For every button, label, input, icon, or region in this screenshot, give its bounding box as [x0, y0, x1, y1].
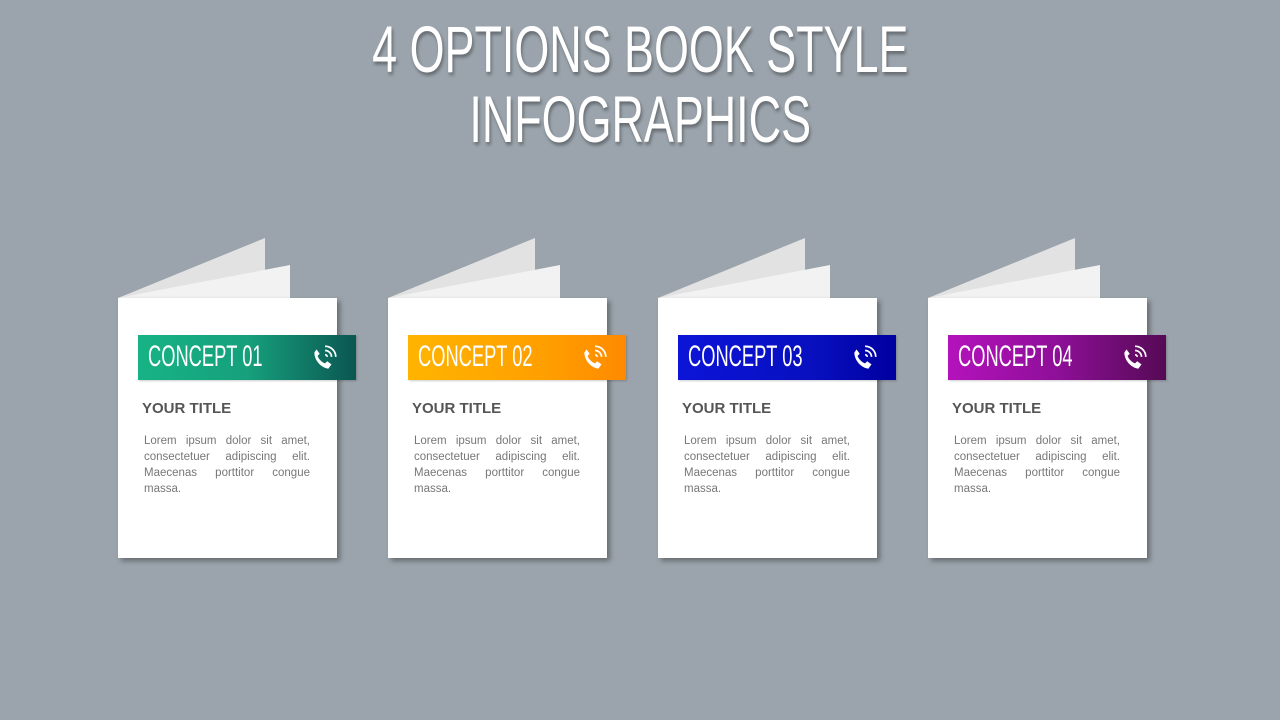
heading: YOUR TITLE [682, 400, 771, 417]
banner: concept 02 [408, 335, 626, 380]
icon: phone [854, 345, 877, 369]
banner: concept 03 [678, 335, 896, 380]
text block: Lorem ipsum dolor sit amet, consectetuer adipiscing elit. Maecenas porttitor congue massa. [414, 435, 580, 495]
heading: YOUR TITLE [142, 400, 231, 417]
banner: concept 02: CONCEPT 02 [418, 340, 533, 373]
book: concept 01 [118, 238, 358, 564]
front page [658, 298, 877, 558]
back pages [928, 238, 1100, 298]
banner: concept 01: CONCEPT 01 [148, 340, 263, 373]
back pages [658, 238, 830, 298]
text block: Lorem ipsum dolor sit amet, consectetuer adipiscing elit. Maecenas porttitor congue massa. [954, 435, 1120, 495]
banner: concept 01 [138, 335, 356, 380]
banner: concept 04 [948, 335, 1166, 380]
title: INFOGRAPHICS [469, 82, 811, 156]
front page [118, 298, 337, 558]
icon: phone [584, 345, 607, 369]
title [372, 12, 910, 156]
banner: concept 04: CONCEPT 04 [958, 340, 1073, 373]
banner: concept 03: CONCEPT 03 [688, 340, 803, 373]
icon: phone [314, 345, 337, 369]
heading: YOUR TITLE [952, 400, 1041, 417]
text block: Lorem ipsum dolor sit amet, consectetuer adipiscing elit. Maecenas porttitor congue massa. [684, 435, 850, 495]
icon: phone [1124, 345, 1147, 369]
text block: Lorem ipsum dolor sit amet, consectetuer adipiscing elit. Maecenas porttitor congue massa. [144, 435, 310, 495]
front page [388, 298, 607, 558]
book: concept 03 [658, 238, 898, 564]
front page [928, 298, 1147, 558]
back pages [118, 238, 290, 298]
title: 4 OPTIONS BOOK STYLE [372, 12, 908, 86]
heading: YOUR TITLE [412, 400, 501, 417]
book: concept 02 [388, 238, 628, 564]
back pages [388, 238, 560, 298]
book: concept 04 [928, 238, 1168, 564]
